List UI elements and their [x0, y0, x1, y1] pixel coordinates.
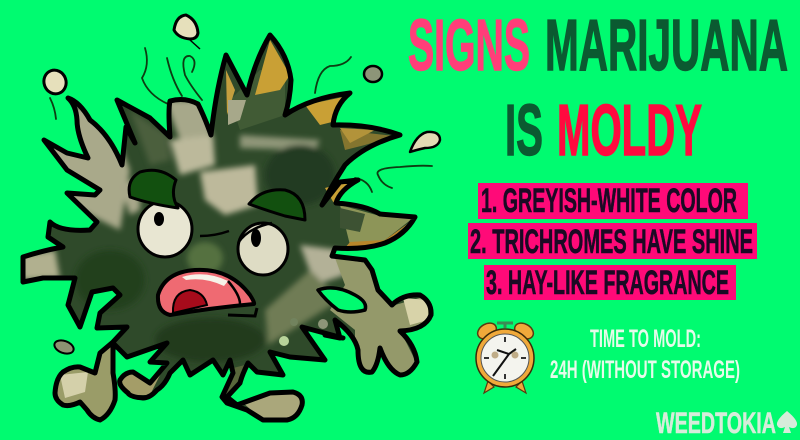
title	[408, 6, 788, 171]
icon: spade	[777, 411, 797, 433]
brow crease	[200, 231, 229, 236]
spore: grey right	[364, 66, 382, 82]
right eye	[238, 190, 305, 275]
time to mold note	[550, 325, 740, 384]
icon: alarm clock	[475, 320, 536, 393]
left eye	[129, 170, 192, 257]
list of signs	[468, 182, 757, 302]
bud body	[20, 32, 434, 422]
spore: left	[41, 67, 69, 97]
note line 1: TIME TO MOLD:	[590, 325, 701, 353]
wisps	[50, 48, 432, 192]
title word: IS: IS	[505, 91, 543, 171]
spore: small oval	[53, 338, 75, 356]
title word: SIGNS: SIGNS	[408, 6, 530, 86]
mouth	[158, 270, 257, 316]
mold character illustration	[20, 14, 442, 422]
brand logo	[656, 407, 797, 440]
spore: teardrop	[410, 132, 440, 152]
spore: top	[174, 15, 200, 49]
